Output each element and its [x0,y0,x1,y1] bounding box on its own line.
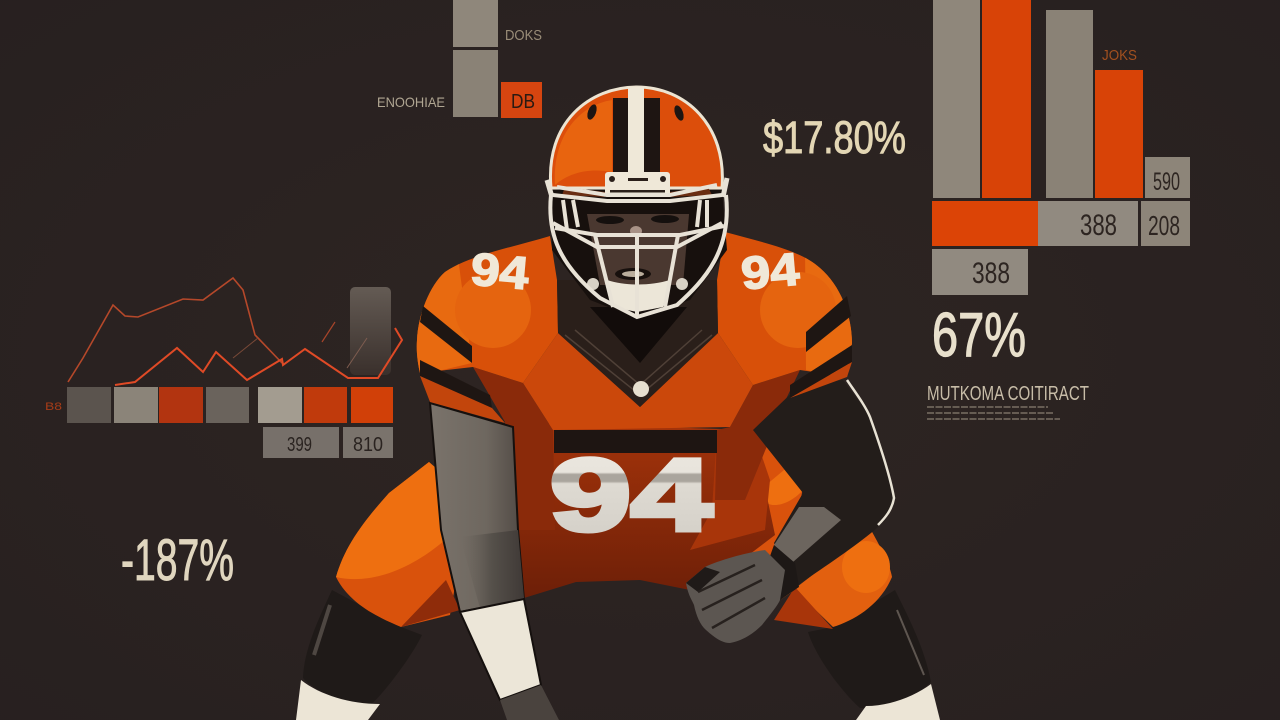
chart: top right bars: 388 [1080,209,1117,242]
jersey left dark side panel [473,367,555,530]
right arm [753,380,894,600]
text block: maximum contract: MUTKOMA COITIRACT [927,383,1089,405]
chart: top right bars: JOKS [1102,47,1137,64]
line chart with bars: left: 810 [353,434,383,456]
stat: top percentage: $17.80% [763,112,906,163]
jersey right dark side panel [715,370,800,500]
player illustration [296,87,940,720]
left arm [430,403,559,720]
left shoulder [416,236,558,423]
left thigh [336,462,470,627]
line chart with bars: left [45,278,402,458]
collar V [557,280,718,407]
chart: top right bars: 590 [1153,168,1180,196]
glove [686,550,785,643]
chart: top centre bars: DB [511,91,535,113]
line chart with bars: left: 399 [287,434,312,456]
chart: top centre bars: DOKS [505,27,542,44]
right thigh [700,438,892,629]
chart: top right bars: 388 [972,257,1010,290]
chart: top right bars [932,0,1190,295]
left knee pad and sock [296,590,422,720]
stat: right percentage: 67% [932,301,1026,370]
chest number 94: 94 [550,438,712,552]
chart: top right bars: 208 [1148,210,1180,241]
chest number bar [554,430,717,453]
jersey right side panel [690,430,770,550]
right shoulder number: 94 [739,243,802,299]
chest centre panel [523,333,753,430]
jersey lower body [505,422,775,598]
line chart with bars: left: B8 [45,401,62,413]
chart: top centre bars: ENOOHIAE [377,94,445,110]
left shoulder number: 94 [469,243,532,299]
helmet [547,87,727,318]
text block: maximum contract [927,383,1089,419]
chart: top centre bars [377,0,542,118]
right shoulder [717,232,852,398]
right knee pad and sock [808,590,940,720]
stat: left percentage: -187% [121,528,234,593]
